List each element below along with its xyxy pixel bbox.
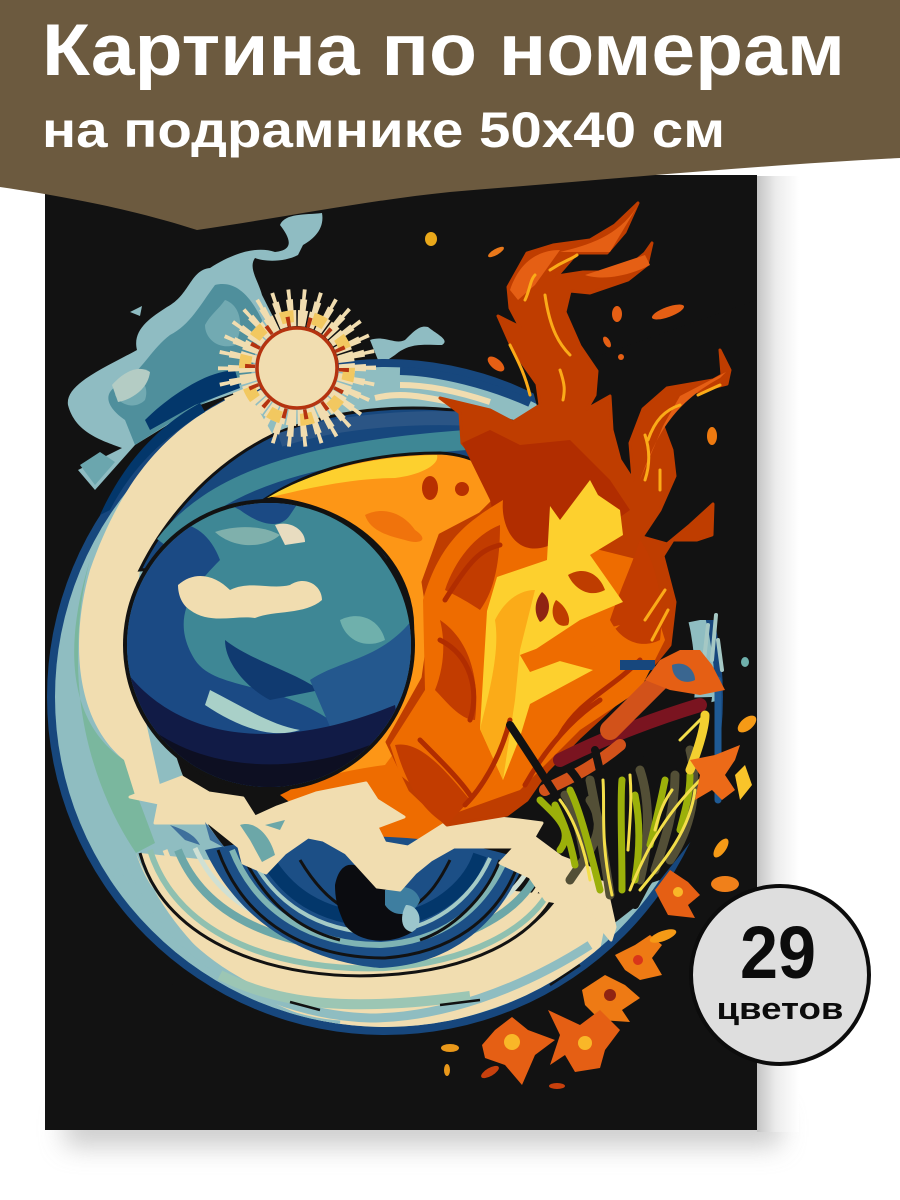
subtitle: на подрамнике 50х40 см bbox=[42, 102, 725, 158]
sea foam bbox=[130, 777, 615, 940]
colour count badge bbox=[691, 886, 869, 1064]
header banner bbox=[0, 0, 900, 230]
title: Картина по номерам bbox=[42, 10, 845, 91]
sun bbox=[225, 296, 369, 440]
orange flowers and embers bbox=[425, 232, 759, 1089]
colours label: цветов bbox=[716, 991, 844, 1026]
grass and leaves bbox=[510, 615, 722, 905]
swirl ring bbox=[47, 300, 757, 1035]
canvas shadow bbox=[65, 176, 799, 1146]
flames bbox=[387, 203, 730, 825]
number of colours: 29 bbox=[740, 911, 816, 994]
orange moon bbox=[267, 453, 560, 855]
ocean wave bbox=[115, 836, 610, 1030]
earth globe bbox=[120, 499, 420, 800]
painting on black canvas bbox=[45, 175, 759, 1130]
teal smoke cloud bbox=[68, 213, 445, 490]
